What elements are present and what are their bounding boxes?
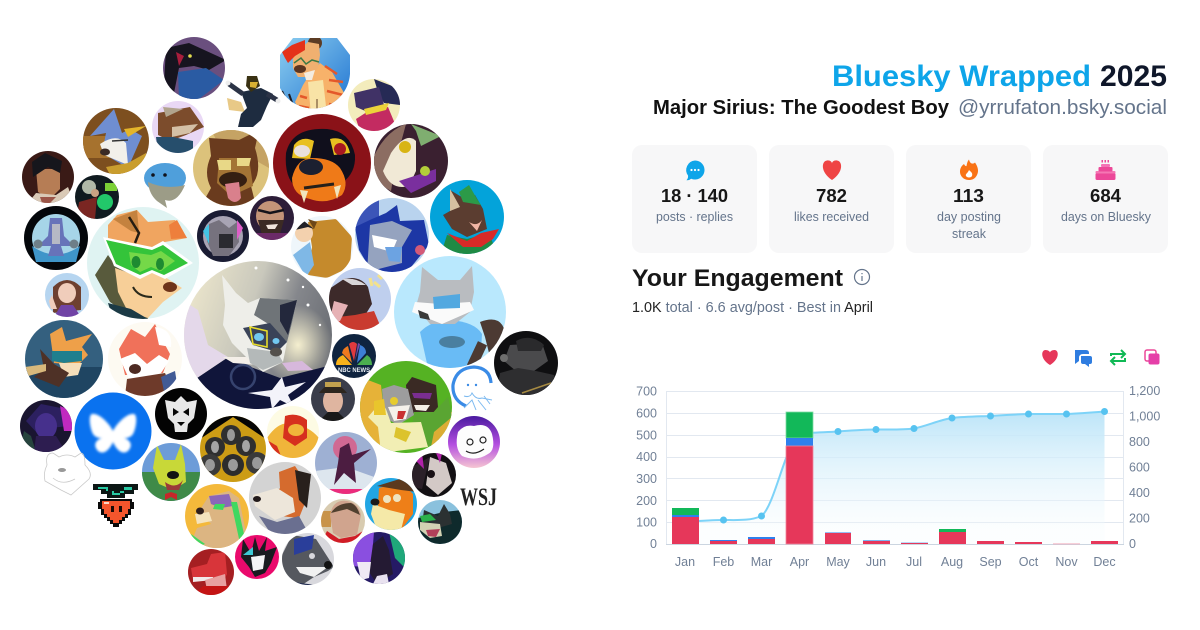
avatar: orange wolf with glasses bbox=[249, 462, 321, 534]
title: Bluesky Wrapped bbox=[832, 60, 1091, 93]
stat label: streak bbox=[952, 226, 986, 241]
avatar: Bluesky butterfly bbox=[74, 392, 152, 470]
month labels: Jul bbox=[906, 555, 922, 569]
stacked bars bbox=[672, 412, 1118, 544]
title year: 2025 bbox=[1100, 60, 1167, 93]
avatar: man with dark hair bbox=[22, 151, 74, 203]
avatar: purple hooded figure bbox=[20, 400, 72, 452]
left axis labels: 700 bbox=[636, 384, 657, 398]
avatar: big silver wolf bbox=[184, 261, 332, 409]
left axis labels: 200 bbox=[636, 494, 657, 508]
right axis labels: 800 bbox=[1129, 435, 1150, 449]
avatar: pencil sketch bear bbox=[44, 453, 90, 495]
stat label: days on Bluesky bbox=[1061, 209, 1151, 224]
month labels: May bbox=[826, 555, 851, 569]
icon: likes bbox=[1042, 350, 1058, 365]
avatar: black ring creature bbox=[24, 206, 88, 270]
right axis labels: 1,000 bbox=[1129, 410, 1160, 424]
avatar: man with brown bear bbox=[291, 216, 353, 278]
stat label bbox=[937, 209, 1001, 241]
avatar: grey and brown heroes on green bbox=[360, 361, 452, 453]
avatar: white ghost on purple bbox=[448, 416, 500, 468]
stat value: 18 · 140 bbox=[661, 185, 728, 206]
stat value: 684 bbox=[1090, 185, 1122, 206]
icon: quotes bbox=[1145, 350, 1160, 364]
panel: likes card bbox=[769, 145, 894, 253]
avatar: tiger with red hair bbox=[280, 38, 350, 108]
panel: header bbox=[653, 60, 1167, 119]
panel: avatar bubble cloud bbox=[20, 36, 558, 595]
avatar: black and white mask bbox=[155, 388, 207, 440]
avatar: tan bear with green bbox=[185, 484, 249, 548]
month labels: Oct bbox=[1019, 555, 1039, 569]
month labels: Mar bbox=[751, 555, 772, 569]
heading: Your Engagement: Your Engagement bbox=[632, 265, 843, 292]
avatar: spheal bbox=[144, 163, 186, 208]
grid lines bbox=[666, 391, 1124, 544]
left axis labels: 300 bbox=[636, 472, 657, 486]
display name: Major Sirius: The Goodest Boy bbox=[653, 97, 950, 119]
avatar: green and brown elf dog bbox=[430, 180, 504, 254]
avatar: pink silhouette cat bbox=[315, 432, 377, 494]
stat label: posts · replies bbox=[656, 209, 733, 224]
panel: posts and replies card bbox=[632, 145, 757, 253]
left axis labels bbox=[636, 384, 657, 551]
month labels: Jun bbox=[866, 555, 886, 569]
line markers bbox=[720, 408, 1108, 524]
avatar: fox with green visor bbox=[87, 207, 199, 319]
avatar: anime purple character bbox=[374, 124, 448, 198]
right axis labels: 600 bbox=[1129, 460, 1150, 474]
avatar: dark grey figure in bubble bbox=[197, 210, 249, 262]
stat value: 782 bbox=[816, 185, 847, 206]
right axis labels: 1,200 bbox=[1129, 384, 1160, 398]
engagement summary: 1.0K total · 6.6 avg/post · Best in April bbox=[632, 300, 873, 316]
avatar: black and gold ghosts bbox=[199, 416, 268, 482]
icon: info bbox=[854, 270, 870, 284]
left axis labels: 400 bbox=[636, 450, 657, 464]
avatar: man in red shirt bbox=[321, 499, 365, 543]
icon: replies bbox=[1075, 350, 1092, 367]
right axis labels: 400 bbox=[1129, 486, 1150, 500]
avatar: NBC News peacock: NBC NEWS bbox=[338, 367, 371, 374]
handle: @yrrufaton.bsky.social bbox=[958, 97, 1167, 119]
cumulative area bbox=[685, 412, 1104, 544]
right axis labels bbox=[1129, 384, 1160, 551]
chart legend bbox=[1042, 350, 1160, 367]
panel: streak card bbox=[906, 145, 1031, 253]
month labels: Apr bbox=[790, 555, 809, 569]
icon: reposts bbox=[1111, 350, 1125, 365]
month labels bbox=[675, 555, 1116, 569]
avatar: blue-grey wolf with glasses bbox=[83, 108, 149, 177]
avatar: NBC News peacock bbox=[332, 334, 376, 378]
avatar: jumping navy figure bbox=[226, 76, 280, 127]
avatar: yellow lion bbox=[267, 406, 319, 458]
icon: cake bbox=[1096, 160, 1116, 180]
left axis labels: 600 bbox=[636, 406, 657, 420]
month labels: Feb bbox=[713, 555, 734, 569]
month labels: Dec bbox=[1093, 555, 1116, 569]
avatar: orange fox with mask bbox=[25, 320, 103, 398]
month labels: Aug bbox=[941, 555, 963, 569]
avatar: purple dragon on blue bbox=[163, 37, 226, 99]
right axis labels: 0 bbox=[1129, 537, 1136, 551]
combo chart: monthly engagement bbox=[636, 384, 1160, 569]
stat label: day posting bbox=[937, 209, 1001, 224]
icon: chat bubble bbox=[686, 160, 705, 180]
WSJ logo text: WSJ bbox=[460, 484, 497, 511]
avatar: orange bear with glasses bbox=[365, 478, 417, 530]
avatar: husky with green bbox=[418, 500, 462, 544]
right axis labels: 200 bbox=[1129, 512, 1150, 526]
icon: flame bbox=[960, 160, 978, 180]
month labels: Sep bbox=[979, 555, 1002, 569]
avatar: brown dog with tongue bbox=[193, 130, 269, 206]
month labels: Nov bbox=[1055, 555, 1078, 569]
left axis labels: 500 bbox=[636, 428, 657, 442]
avatar: green magic character bbox=[75, 175, 119, 219]
avatar: bearded man bbox=[250, 196, 294, 241]
stat label: likes received bbox=[794, 209, 869, 224]
avatar: yellow-green dog bbox=[142, 443, 200, 501]
avatar: crocodile bbox=[188, 549, 234, 595]
cumulative line bbox=[685, 412, 1104, 522]
month labels: Jan bbox=[675, 555, 695, 569]
stat value: 113 bbox=[953, 185, 984, 206]
avatar: man with crown hat bbox=[311, 377, 355, 421]
avatar: pixel carrot bbox=[93, 484, 138, 527]
avatar: brown dragon on lilac bbox=[152, 101, 204, 153]
left axis labels: 100 bbox=[636, 516, 657, 530]
avatar: navy wolf grin bbox=[355, 198, 429, 272]
avatar: purple aurora creature bbox=[353, 532, 405, 584]
avatar: fursuit lion head bbox=[273, 114, 371, 212]
panel: days on Bluesky card bbox=[1043, 145, 1168, 253]
avatar: dark animal with alert lines bbox=[329, 268, 391, 330]
avatar: pink zebra bbox=[235, 535, 279, 579]
avatar: girl with glasses bbox=[45, 273, 89, 317]
avatar: grey wolf grin bbox=[282, 533, 334, 585]
avatar: purple dog on cream bbox=[348, 79, 400, 131]
avatar: black coat officer bbox=[494, 331, 558, 395]
icon: heart bbox=[823, 160, 841, 180]
avatar: panda punk bbox=[412, 453, 456, 497]
avatar: red panda bbox=[108, 322, 182, 396]
avatar: raccoon in blue bbox=[394, 256, 506, 369]
left axis labels: 0 bbox=[650, 537, 657, 551]
avatar: blue line drawing bbox=[453, 367, 492, 410]
